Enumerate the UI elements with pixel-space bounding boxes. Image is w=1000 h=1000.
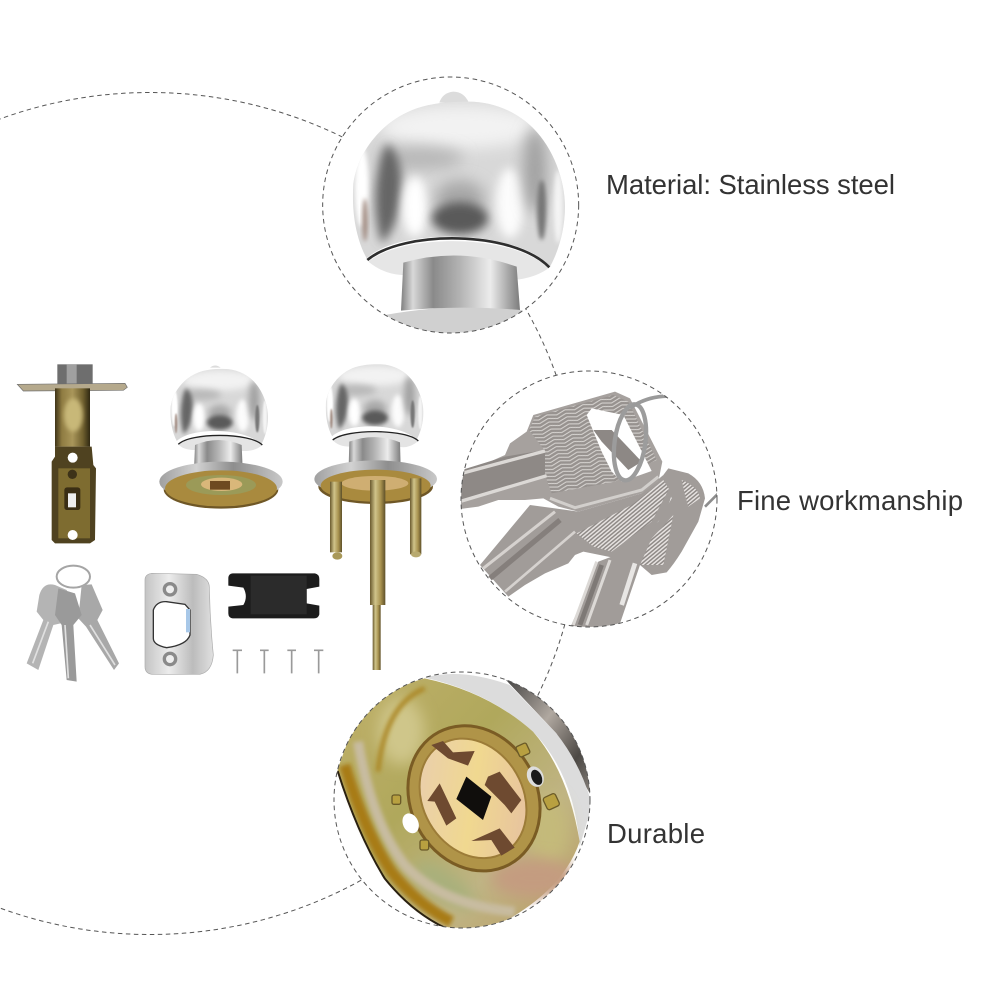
brass dish (337, 678, 580, 930)
product group (17, 362, 437, 682)
product: black plate (228, 573, 319, 618)
knob pin (439, 92, 469, 103)
panel: brass plate detail (334, 672, 598, 930)
brass dish shade (378, 688, 425, 772)
brass left band (345, 765, 451, 922)
product: latch (17, 364, 127, 543)
label: workmanship: Fine workmanship (737, 485, 963, 516)
product: strike plate (145, 573, 213, 674)
product: small keys (27, 566, 119, 682)
brass green patches (378, 698, 425, 765)
label: material: Material: Stainless steel (606, 169, 895, 200)
tabs (427, 741, 521, 856)
dark steel band (506, 680, 590, 794)
product: knob back with spindles (314, 362, 437, 670)
knob neck (401, 256, 520, 311)
rivets (392, 742, 560, 850)
inner ring (406, 724, 542, 872)
large dashed circle (0, 92, 580, 934)
inner plate (418, 738, 528, 859)
panel: keys detail (460, 371, 718, 628)
knob black rim line (367, 238, 549, 267)
panel: stainless steel knob detail (323, 77, 579, 337)
white hole (402, 813, 419, 834)
square hole (456, 777, 491, 820)
product: knob front (159, 365, 283, 509)
key ring (609, 396, 668, 482)
spindles (330, 482, 342, 552)
second key (480, 475, 672, 597)
oval hole (526, 766, 544, 787)
product: screws (233, 650, 323, 673)
knob base (386, 308, 523, 333)
wire tail (705, 493, 718, 507)
first key (460, 392, 662, 512)
third key (570, 468, 705, 628)
label: durable: Durable (607, 818, 705, 849)
steel band (425, 674, 592, 847)
knob ball (353, 102, 565, 266)
key hole (587, 408, 652, 482)
knob plate under rim (368, 241, 548, 279)
